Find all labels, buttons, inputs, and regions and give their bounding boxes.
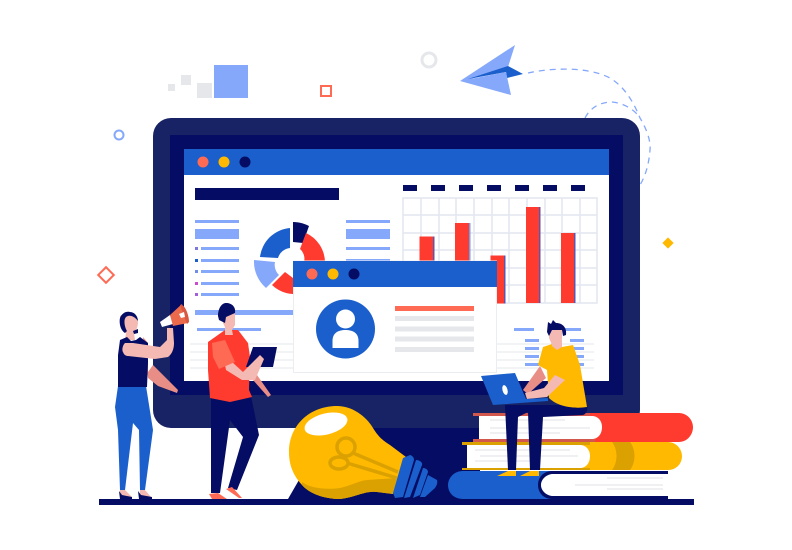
right text list <box>346 220 390 262</box>
icon: yellow diamond <box>662 237 674 249</box>
figure: woman with megaphone <box>115 304 189 499</box>
head and neck <box>223 313 235 335</box>
ground line <box>99 499 694 505</box>
stack of books <box>448 413 693 499</box>
neck <box>552 340 562 350</box>
bulb screw cap <box>393 455 437 498</box>
lower left data rows <box>190 310 295 368</box>
chart bars <box>420 207 576 304</box>
icon: light bulb <box>289 406 437 499</box>
left text list <box>195 220 239 296</box>
panel: main screen <box>184 149 609 381</box>
hair <box>120 312 138 334</box>
shoes <box>497 471 539 476</box>
profile window title bar <box>293 261 497 287</box>
icon: red diamond outline <box>98 267 114 283</box>
pants <box>115 386 153 490</box>
bar chart <box>403 185 597 304</box>
tablet <box>246 347 277 367</box>
head and neck <box>120 314 138 340</box>
forearm <box>525 375 565 399</box>
figure: man sitting with laptop <box>481 320 587 476</box>
laptop <box>481 373 548 405</box>
shoes <box>119 491 152 499</box>
profile text lines <box>395 306 474 352</box>
panel: profile window <box>293 261 497 372</box>
top red book <box>473 413 693 442</box>
icon: paper plane <box>460 45 523 95</box>
feet <box>120 490 151 497</box>
icon: grey ring <box>422 53 436 67</box>
sleeve <box>212 340 235 369</box>
megaphone <box>160 304 189 327</box>
bottom blue book <box>448 471 668 499</box>
chart grid <box>403 198 597 303</box>
figure: man with tablet <box>208 303 277 499</box>
trousers <box>211 396 259 493</box>
dashboard heading bar <box>195 188 339 200</box>
shoes <box>209 487 242 499</box>
icon: user avatar <box>316 300 375 358</box>
monitor stand <box>288 428 480 499</box>
middle yellow book <box>462 442 682 470</box>
monitor <box>153 118 640 428</box>
front arm <box>225 355 264 380</box>
raised arm <box>122 328 174 359</box>
chart column labels <box>403 185 585 191</box>
back arm <box>143 337 178 393</box>
hair <box>218 303 235 323</box>
torso <box>118 337 148 387</box>
bulb filament <box>330 438 398 478</box>
dashed flight path <box>528 69 650 185</box>
trousers <box>505 405 587 470</box>
window title bar <box>184 149 609 175</box>
bulb highlight <box>302 408 350 440</box>
decorative squares top left <box>168 65 248 98</box>
rear arm <box>523 366 546 394</box>
shirt <box>208 330 252 402</box>
lower right data rows <box>497 328 594 368</box>
face <box>549 328 562 345</box>
donut chart <box>254 222 325 294</box>
back arm <box>253 372 271 397</box>
hair <box>547 320 566 336</box>
icon: blue ring <box>114 130 124 140</box>
icon: small red square outline <box>321 86 331 96</box>
shirt <box>538 344 587 408</box>
